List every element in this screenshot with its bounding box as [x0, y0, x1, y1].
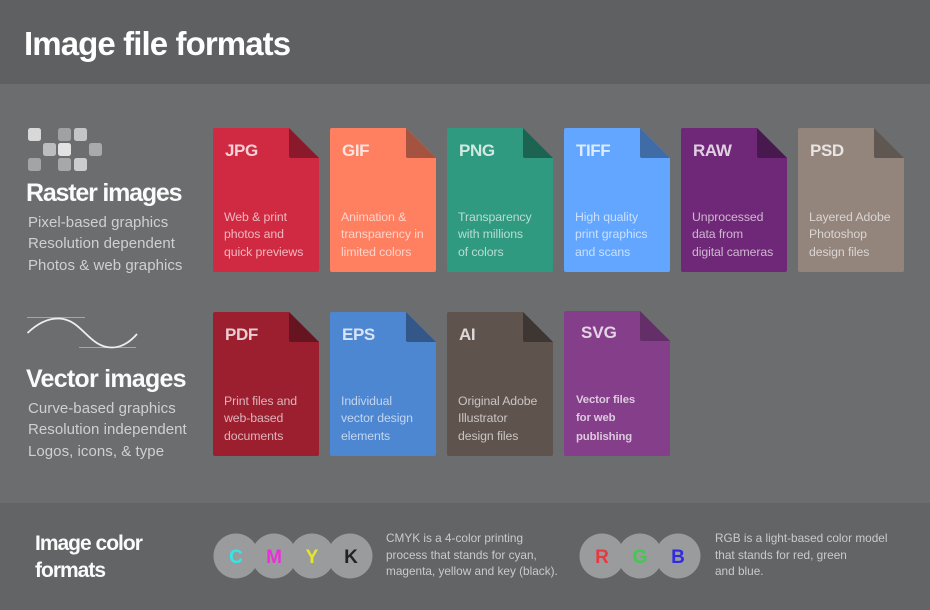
card: PNG: Transparency — [458, 210, 532, 224]
icon: CMYK circles: Y — [306, 547, 319, 568]
text: RGB description — [715, 531, 887, 578]
card: PNG: PNG — [459, 141, 495, 160]
text: vector image traits: Resolution independent — [28, 421, 187, 438]
title: Image file formats — [24, 25, 290, 62]
card: PDF — [213, 312, 319, 456]
card: PDF: PDF — [225, 325, 258, 344]
card: EPS: EPS — [342, 325, 375, 344]
icon: CMYK circles: M — [266, 547, 282, 568]
card: AI: Illustrator — [458, 411, 507, 425]
card: PSD: design files — [809, 245, 869, 259]
text: vector image traits: Curve-based graphics — [28, 400, 176, 417]
card: SVG: Vector files — [576, 394, 635, 406]
text: vector image traits — [28, 400, 187, 460]
card: PSD: Photoshop — [809, 227, 867, 241]
card: PNG: of colors — [458, 245, 504, 259]
card: SVG: publishing — [576, 431, 632, 443]
card: GIF: GIF — [342, 141, 369, 160]
card: EPS: vector design — [341, 411, 413, 425]
icon: CMYK circles: K — [344, 547, 358, 568]
text: CMYK description: magenta, yellow and key (black). — [386, 564, 558, 578]
card: AI — [447, 312, 553, 456]
card: PSD: Layered Adobe — [809, 210, 890, 224]
card: RAW: RAW — [693, 141, 731, 160]
card: PDF: Print files and — [224, 394, 297, 408]
card: PSD: PSD — [810, 141, 844, 160]
card: TIFF: TIFF — [576, 141, 610, 160]
icon: vector curve — [27, 317, 138, 348]
card: JPG: JPG — [225, 141, 258, 160]
card: AI: Original Adobe — [458, 394, 537, 408]
card: GIF: limited colors — [341, 245, 411, 259]
card: PDF: documents — [224, 429, 283, 443]
text: RGB description: and blue. — [715, 564, 764, 578]
card: JPG: quick previews — [224, 245, 303, 259]
card: AI: AI — [459, 325, 475, 344]
card: TIFF: and scans — [575, 245, 630, 259]
text: CMYK description: CMYK is a 4-color printing — [386, 531, 523, 545]
icon: RGB circles: B — [671, 547, 685, 568]
card: JPG: photos and — [224, 227, 284, 241]
icon: RGB circles: G — [633, 547, 647, 568]
card: GIF: Animation & — [341, 210, 406, 224]
text: raster image traits: Photos & web graphics — [28, 257, 182, 274]
text: RGB description: that stands for red, green — [715, 548, 847, 562]
icon: CMYK circles: C — [229, 547, 243, 568]
icon: raster pixels — [28, 128, 102, 171]
text: raster image traits: Pixel-based graphics — [28, 214, 168, 231]
icon: RGB circles — [580, 534, 700, 578]
heading: vector images: Vector images — [26, 365, 186, 393]
card: PSD — [798, 128, 904, 272]
card: JPG — [213, 128, 319, 272]
card: GIF — [330, 128, 436, 272]
footer band — [0, 503, 930, 610]
icon: CMYK circles — [214, 534, 372, 578]
text: vector image traits: Logos, icons, & type — [28, 443, 164, 460]
heading: image color formats: Image color — [35, 532, 142, 555]
text: CMYK description — [386, 531, 558, 578]
text: raster image traits — [28, 214, 182, 274]
card: RAW — [681, 128, 787, 272]
card: RAW: data from — [692, 227, 743, 241]
card: SVG: for web — [576, 412, 615, 424]
header band — [0, 0, 930, 84]
text: CMYK description: process that stands for cyan, — [386, 548, 537, 562]
card: SVG: SVG — [581, 323, 617, 342]
card: RAW: Unprocessed — [692, 210, 763, 224]
icon: RGB circles: R — [595, 547, 609, 568]
card: PNG: with millions — [458, 227, 523, 241]
text: raster image traits: Resolution dependent — [28, 235, 175, 252]
card: AI: design files — [458, 429, 518, 443]
card: PDF: web-based — [224, 411, 283, 425]
text: RGB description: RGB is a light-based color model — [715, 531, 887, 545]
heading: image color formats: formats — [35, 559, 105, 582]
card: SVG — [564, 311, 670, 456]
card: TIFF: High quality — [575, 210, 638, 224]
card: JPG: Web & print — [224, 210, 287, 224]
heading: raster images: Raster images — [26, 179, 181, 207]
card: EPS: elements — [341, 429, 390, 443]
heading: image color formats — [35, 532, 143, 582]
card: PNG — [447, 128, 553, 272]
card: TIFF: print graphics — [575, 227, 647, 241]
card: GIF: transparency in — [341, 227, 424, 241]
card: EPS: Individual — [341, 394, 392, 408]
card: EPS — [330, 312, 436, 456]
card: RAW: digital cameras — [692, 245, 773, 259]
card: TIFF — [564, 128, 670, 272]
